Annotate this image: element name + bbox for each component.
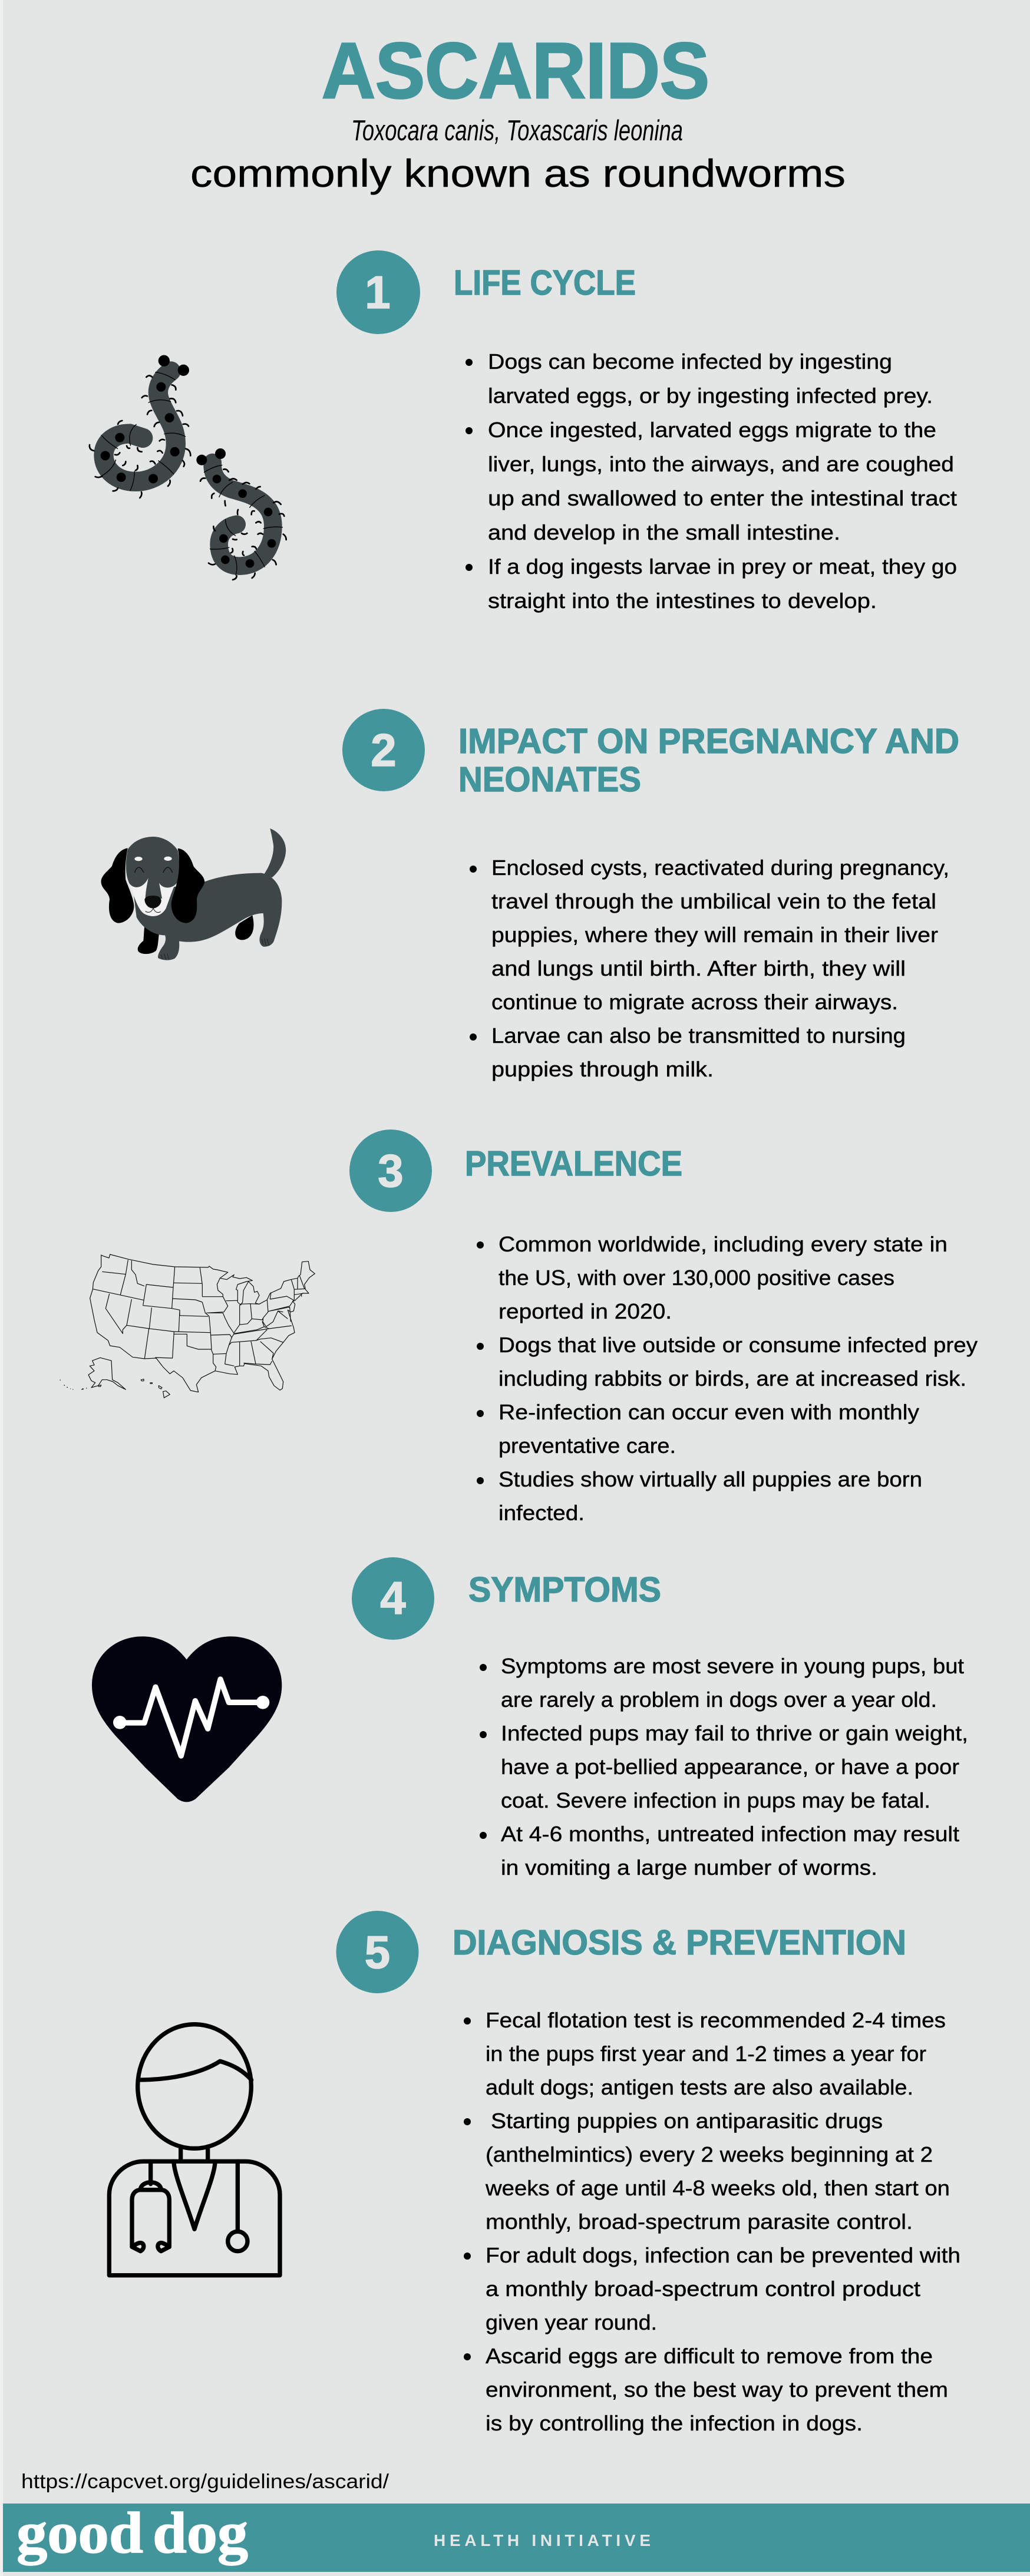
number badge 1: 1 [365,266,391,318]
text: life cycle bullets: Once ingested, larvated eggs migrate to the [488,418,936,442]
text: pregnancy bullets: travel through the umbilical vein to the fetal [491,889,936,913]
text: life cycle bullets: liver, lungs, into the airways, and are coughed [488,452,954,476]
heading: prevalence: PREVALENCE [465,1144,682,1183]
icon: roundworms [90,355,286,580]
text: diagnosis bullets: weeks of age until 4-8 weeks old, then start on [485,2176,950,2200]
text: pregnancy bullets: puppies through milk. [491,1057,714,1081]
footer band [3,2500,1030,2572]
panel: symptoms [92,1557,968,1880]
text: prevalence bullets: the US, with over 130,000 positive cases [499,1266,894,1290]
number badge 4: 4 [380,1572,406,1624]
heading: impact on pregnancy and neonates [458,722,959,799]
text: diagnosis bullets: For adult dogs, infection can be prevented with [486,2243,960,2267]
source URL: https://capcvet.org/guidelines/ascarid/ [21,2471,389,2493]
footer label: health initiative: HEALTH INITIATIVE [434,2531,651,2549]
icon: veterinarian with stethoscope [109,2025,280,2276]
heading: life cycle: LIFE CYCLE [454,263,636,302]
text: life cycle bullets: straight into the intestines to develop. [488,589,877,613]
heading: diagnosis and prevention: DIAGNOSIS & PREVENTION [453,1923,906,1962]
text: diagnosis bullets: environment, so the best way to prevent them [486,2377,948,2402]
text: diagnosis bullets: Fecal flotation test is recommended 2-4 times [486,2008,946,2032]
text: life cycle bullets: If a dog ingests larvae in prey or meat, they go [488,554,957,579]
text: diagnosis bullets: in the pups first year and 1-2 times a year for [486,2042,926,2066]
panel: diagnosis and prevention [109,1911,960,2435]
text: prevalence bullets: infected. [499,1501,585,1525]
heading: symptoms: SYMPTOMS [468,1570,661,1609]
text: diagnosis bullets: adult dogs; antigen tests are also available. [486,2075,913,2099]
text: life cycle bullets [466,349,957,613]
panel: life cycle [90,250,957,613]
text: prevalence bullets: Re-infection can occur even with monthly [499,1400,919,1424]
text: diagnosis bullets: (anthelmintics) every 2 weeks beginning at 2 [486,2142,933,2167]
number badge 3: 3 [378,1145,404,1197]
logo: good dog: good [16,2500,143,2565]
text: prevalence bullets: Common worldwide, including every state in [499,1232,948,1256]
text: diagnosis bullets: given year round. [486,2310,657,2334]
text: life cycle bullets: larvated eggs, or by ingesting infected prey. [488,384,933,408]
icon: heart with pulse line [92,1636,282,1802]
text: symptoms bullets: Symptoms are most severe in young pups, but [501,1654,964,1678]
text: life cycle bullets: Dogs can become infected by ingesting [488,349,892,374]
text: pregnancy bullets: continue to migrate across their airways. [491,990,898,1014]
logo: good dog [16,2500,248,2565]
icon: US state map [60,1254,315,1398]
text: diagnosis bullets: is by controlling the infection in dogs. [486,2411,863,2435]
text: life cycle bullets: up and swallowed to enter the intestinal tract [488,486,957,510]
number badge 5 [336,1911,418,1993]
text: prevalence bullets: reported in 2020. [499,1299,672,1323]
text: pregnancy bullets: Larvae can also be transmitted to nursing [491,1023,906,1048]
number badge 4 [352,1557,434,1640]
text: prevalence bullets: preventative care. [499,1434,676,1458]
text: symptoms bullets: are rarely a problem in dogs over a year old. [501,1687,937,1712]
heading: impact on pregnancy and neonates: NEONATES [458,760,641,799]
text: symptoms bullets: At 4-6 months, untreated infection may result [501,1822,959,1846]
panel: prevalence [60,1130,978,1525]
text: pregnancy bullets: Enclosed cysts, reactivated during pregnancy, [491,856,949,880]
title: ASCARIDS: ASCARIDS [322,27,709,115]
logo: good dog: dog [153,2500,248,2565]
text: pregnancy bullets: puppies, where they will remain in their liver [491,923,938,947]
panel: impact on pregnancy and neonates [101,709,959,1081]
title block [190,27,846,195]
text: life cycle bullets: and develop in the small intestine. [488,520,840,544]
text: prevalence bullets [477,1232,978,1525]
number badge 5: 5 [365,1926,390,1978]
text: symptoms bullets: Infected pups may fail to thrive or gain weight, [501,1721,968,1745]
text: diagnosis bullets: monthly, broad-spectrum parasite control. [486,2210,913,2234]
subtitle: scientific names: Toxocara canis, Toxascaris leonina [351,115,683,147]
heading: impact on pregnancy and neonates: IMPACT ON PREGNANCY AND [458,722,959,761]
text: diagnosis bullets: Starting puppies on antiparasitic drugs [491,2109,883,2133]
number badge 3 [349,1130,432,1212]
text: prevalence bullets: including rabbits or birds, are at increased risk. [499,1366,966,1391]
text: symptoms bullets [480,1654,968,1880]
icon: dachshund [101,828,286,960]
text: pregnancy bullets [470,856,949,1081]
text: symptoms bullets: in vomiting a large number of worms. [501,1855,877,1880]
text: diagnosis bullets: a monthly broad-spectrum control product [486,2277,920,2301]
text: diagnosis bullets [464,2008,960,2435]
subtitle: common name: commonly known as roundworms [190,151,846,195]
text: prevalence bullets: Dogs that live outside or consume infected prey [499,1333,978,1357]
number badge 1 [336,250,420,334]
text: prevalence bullets: Studies show virtually all puppies are born [499,1467,922,1491]
text: pregnancy bullets: and lungs until birth. After birth, they will [491,956,906,980]
text: symptoms bullets: coat. Severe infection in pups may be fatal. [501,1788,930,1812]
text: symptoms bullets: have a pot-bellied appearance, or have a poor [501,1755,959,1779]
number badge 2 [342,709,425,791]
text: diagnosis bullets: Ascarid eggs are difficult to remove from the [486,2344,933,2368]
number badge 2: 2 [371,724,397,776]
